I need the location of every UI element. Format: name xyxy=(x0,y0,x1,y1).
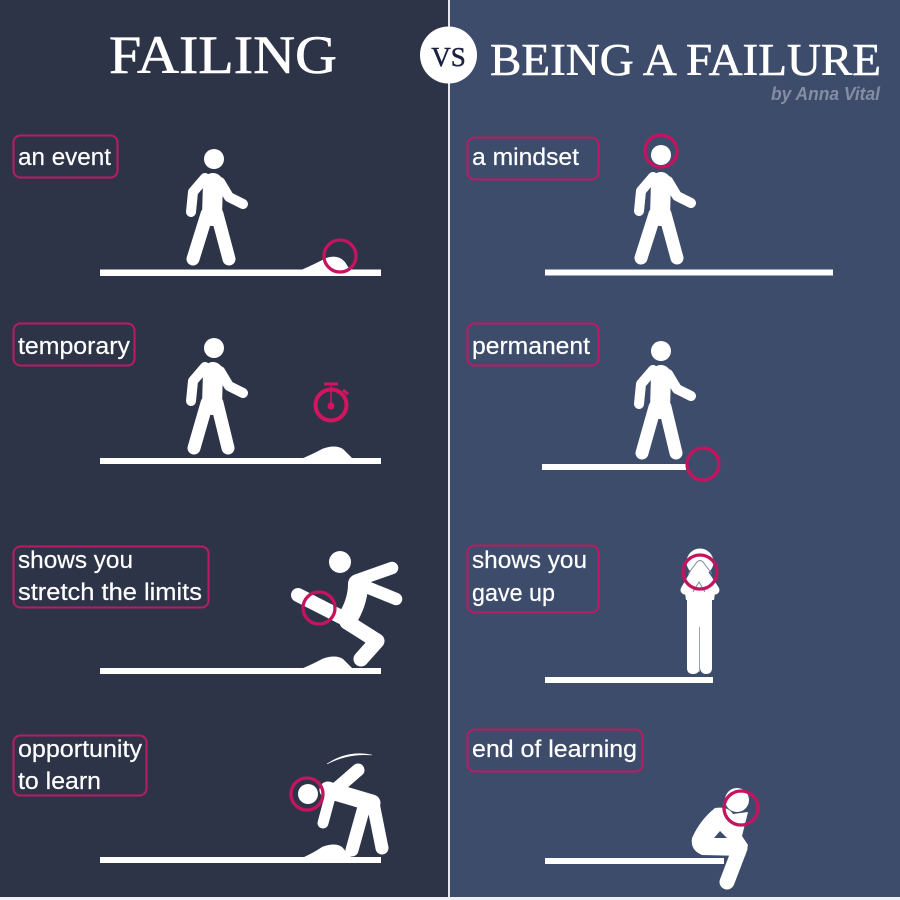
panel: permanent xyxy=(468,324,719,480)
label: shows you stretch the limits xyxy=(14,546,208,608)
highlight ring xyxy=(683,555,717,589)
panel: gave up xyxy=(468,546,717,683)
label: end of learning xyxy=(468,730,642,772)
panel: stretch the limits xyxy=(14,546,396,674)
panel: end of learning xyxy=(468,730,758,882)
label: permanent xyxy=(468,324,598,366)
icon: figure covering face xyxy=(684,548,716,674)
label: shows you stretch the limits: shows you xyxy=(18,547,133,574)
icon: stopwatch xyxy=(316,384,348,420)
credit: by Anna Vital: by Anna Vital xyxy=(771,84,881,104)
highlight ring xyxy=(291,778,323,810)
highlight ring xyxy=(687,448,719,480)
title: failing: FAILING xyxy=(109,25,337,85)
label: a mindset xyxy=(468,138,598,180)
icon: walking figure xyxy=(639,145,691,258)
vs badge: VS xyxy=(431,42,466,72)
ground with bump xyxy=(100,656,381,674)
icon: walking figure xyxy=(191,149,243,259)
highlight ring xyxy=(724,791,758,825)
label: shows you gave up xyxy=(468,546,598,612)
label: opportunity to learn xyxy=(14,736,146,796)
ground line xyxy=(545,677,713,683)
icon: slumped sitting figure xyxy=(692,788,749,882)
ground with bump xyxy=(100,844,381,863)
panel: an event xyxy=(14,136,381,276)
label: an event xyxy=(14,136,118,178)
ground line xyxy=(545,270,833,276)
highlight ring xyxy=(645,135,677,167)
panel: temporary xyxy=(14,324,381,464)
vs badge xyxy=(420,26,477,84)
title: being a failure: BEING A FAILURE xyxy=(490,35,881,85)
icon: walking figure xyxy=(191,338,243,448)
icon: walking figure xyxy=(639,341,691,453)
highlight ring xyxy=(303,592,335,624)
ground with bump xyxy=(100,257,381,276)
label: temporary xyxy=(14,324,134,366)
highlight ring xyxy=(324,240,356,272)
label: end of learning: end of learning xyxy=(472,736,637,763)
icon: tripping figure xyxy=(298,754,382,850)
label: shows you gave up: shows you xyxy=(472,547,587,574)
label: an event: an event xyxy=(18,144,111,171)
label: a mindset: a mindset xyxy=(472,144,579,171)
label: shows you stretch the limits: stretch the limits xyxy=(18,579,202,606)
icon: falling figure xyxy=(298,551,396,659)
ground with bump xyxy=(100,446,381,464)
label: permanent: permanent xyxy=(472,333,590,360)
ground line xyxy=(542,464,686,470)
panel: opportunity to learn xyxy=(14,736,382,863)
ground line xyxy=(545,858,724,864)
panel: a mindset xyxy=(468,135,833,276)
label: opportunity to learn: opportunity xyxy=(18,736,143,763)
label: opportunity to learn: to learn xyxy=(18,768,101,795)
label: shows you gave up: gave up xyxy=(472,580,555,607)
label: temporary: temporary xyxy=(18,333,131,360)
